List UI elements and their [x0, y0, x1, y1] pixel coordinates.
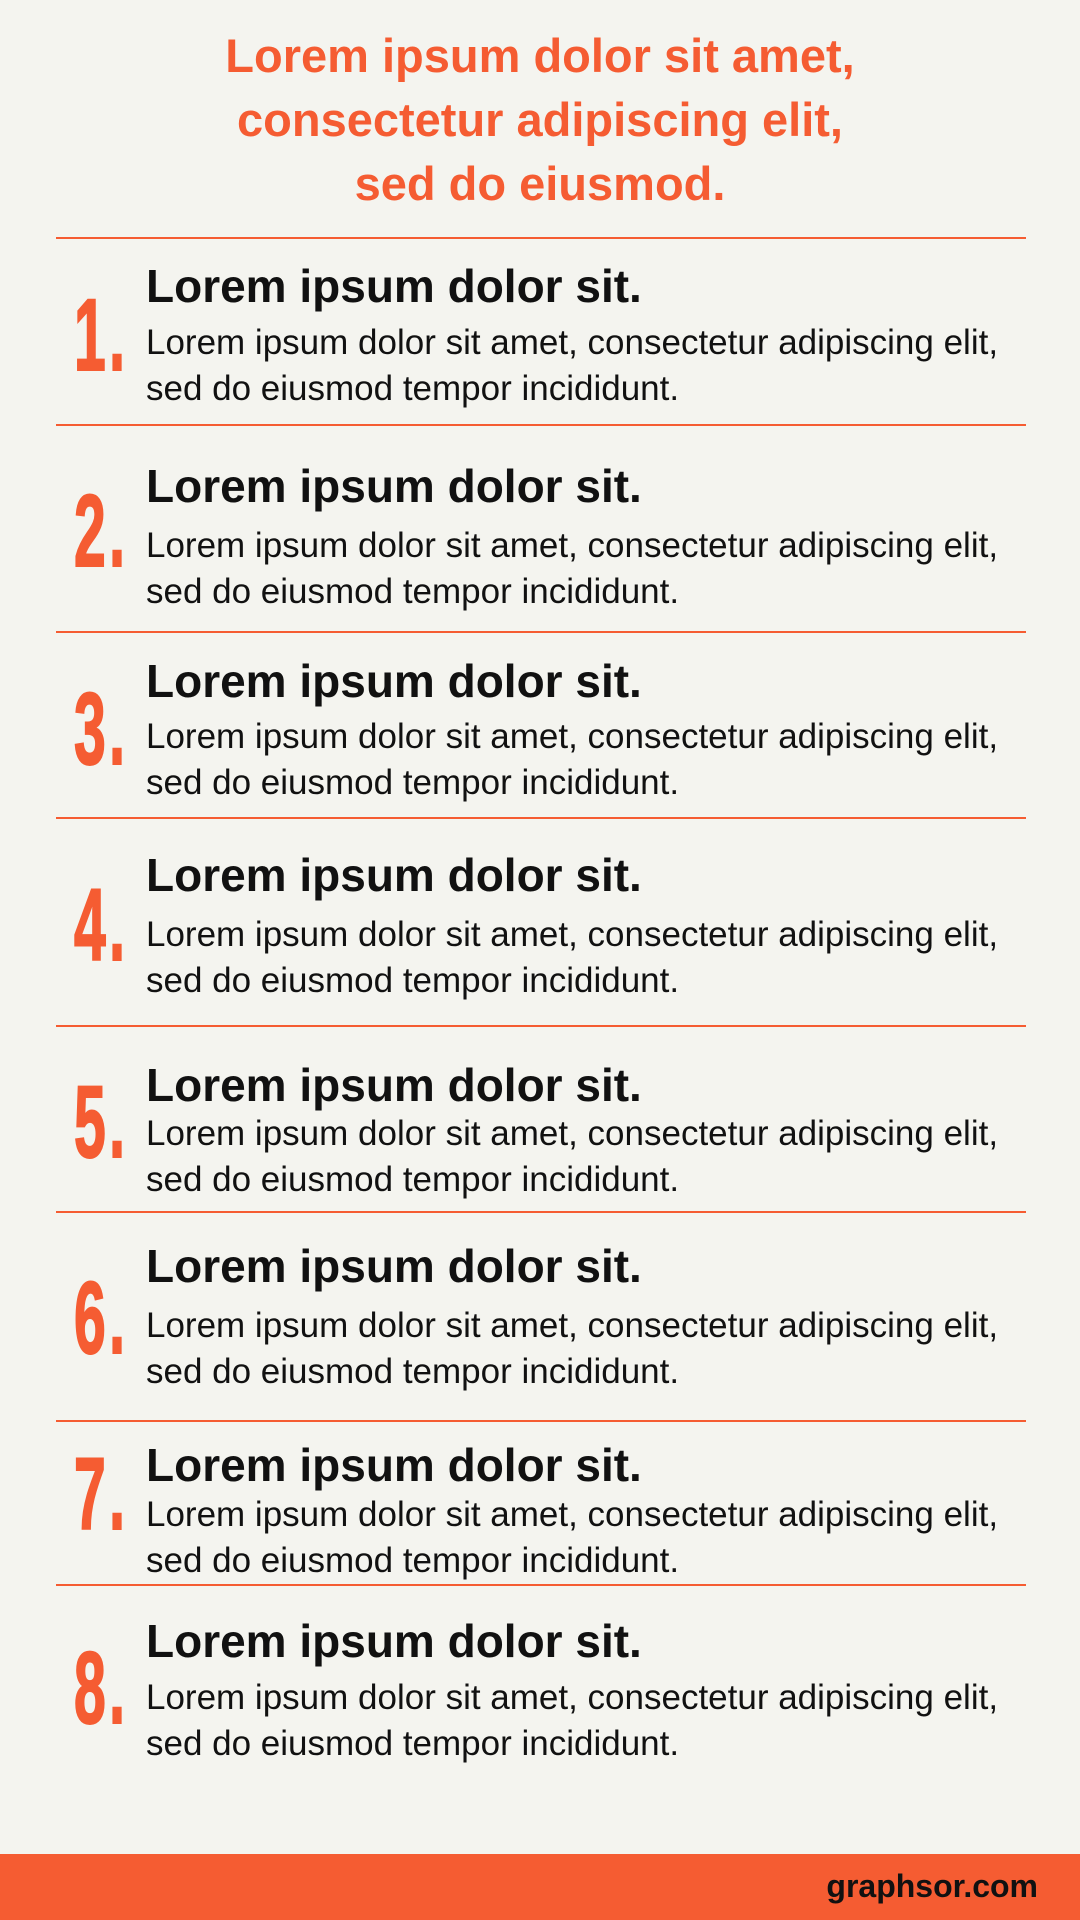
item 1	[74, 260, 998, 408]
text: Lorem ipsum dolor sit.	[146, 1240, 642, 1292]
title: sed do eiusmod.	[355, 157, 725, 210]
text: sed do eiusmod tempor incididunt.	[146, 1541, 679, 1580]
text: Lorem ipsum dolor sit.	[146, 655, 642, 707]
text: sed do eiusmod tempor incididunt.	[146, 1724, 679, 1763]
item 4	[74, 849, 998, 1000]
number 8: 8.	[74, 1631, 128, 1745]
text: Lorem ipsum dolor sit.	[146, 260, 642, 312]
text: Lorem ipsum dolor sit amet, consectetur adipiscing elit,	[146, 323, 998, 362]
text: Lorem ipsum dolor sit.	[146, 1439, 642, 1491]
item 7	[74, 1437, 998, 1580]
footer: graphsor.com	[826, 1868, 1038, 1904]
footer	[0, 1854, 1080, 1920]
item 8	[74, 1615, 998, 1763]
text: sed do eiusmod tempor incididunt.	[146, 572, 679, 611]
text: Lorem ipsum dolor sit.	[146, 1615, 642, 1667]
text: Lorem ipsum dolor sit.	[146, 849, 642, 901]
text: sed do eiusmod tempor incididunt.	[146, 763, 679, 802]
text: sed do eiusmod tempor incididunt.	[146, 1160, 679, 1199]
item 6	[74, 1240, 998, 1391]
text: Lorem ipsum dolor sit amet, consectetur adipiscing elit,	[146, 717, 998, 756]
item 3	[74, 655, 998, 802]
text: Lorem ipsum dolor sit.	[146, 460, 642, 512]
number 7: 7.	[74, 1437, 128, 1551]
text: Lorem ipsum dolor sit amet, consectetur adipiscing elit,	[146, 526, 998, 565]
number 5: 5.	[74, 1065, 128, 1179]
title: consectetur adipiscing elit,	[237, 93, 843, 146]
text: sed do eiusmod tempor incididunt.	[146, 961, 679, 1000]
title: Lorem ipsum dolor sit amet,	[225, 29, 855, 82]
text: Lorem ipsum dolor sit amet, consectetur adipiscing elit,	[146, 1306, 998, 1345]
item 5	[74, 1059, 998, 1199]
number 3: 3.	[74, 672, 128, 786]
text: Lorem ipsum dolor sit amet, consectetur adipiscing elit,	[146, 1114, 998, 1153]
number 6: 6.	[74, 1261, 128, 1375]
text: Lorem ipsum dolor sit amet, consectetur adipiscing elit,	[146, 1495, 998, 1534]
text: Lorem ipsum dolor sit.	[146, 1059, 642, 1111]
number 4: 4.	[74, 868, 128, 982]
title	[225, 29, 855, 210]
item 2	[74, 460, 998, 611]
text: sed do eiusmod tempor incididunt.	[146, 369, 679, 408]
number 2: 2.	[74, 474, 128, 588]
text: Lorem ipsum dolor sit amet, consectetur adipiscing elit,	[146, 915, 998, 954]
number 1: 1.	[74, 278, 128, 392]
text: Lorem ipsum dolor sit amet, consectetur adipiscing elit,	[146, 1678, 998, 1717]
text: sed do eiusmod tempor incididunt.	[146, 1352, 679, 1391]
